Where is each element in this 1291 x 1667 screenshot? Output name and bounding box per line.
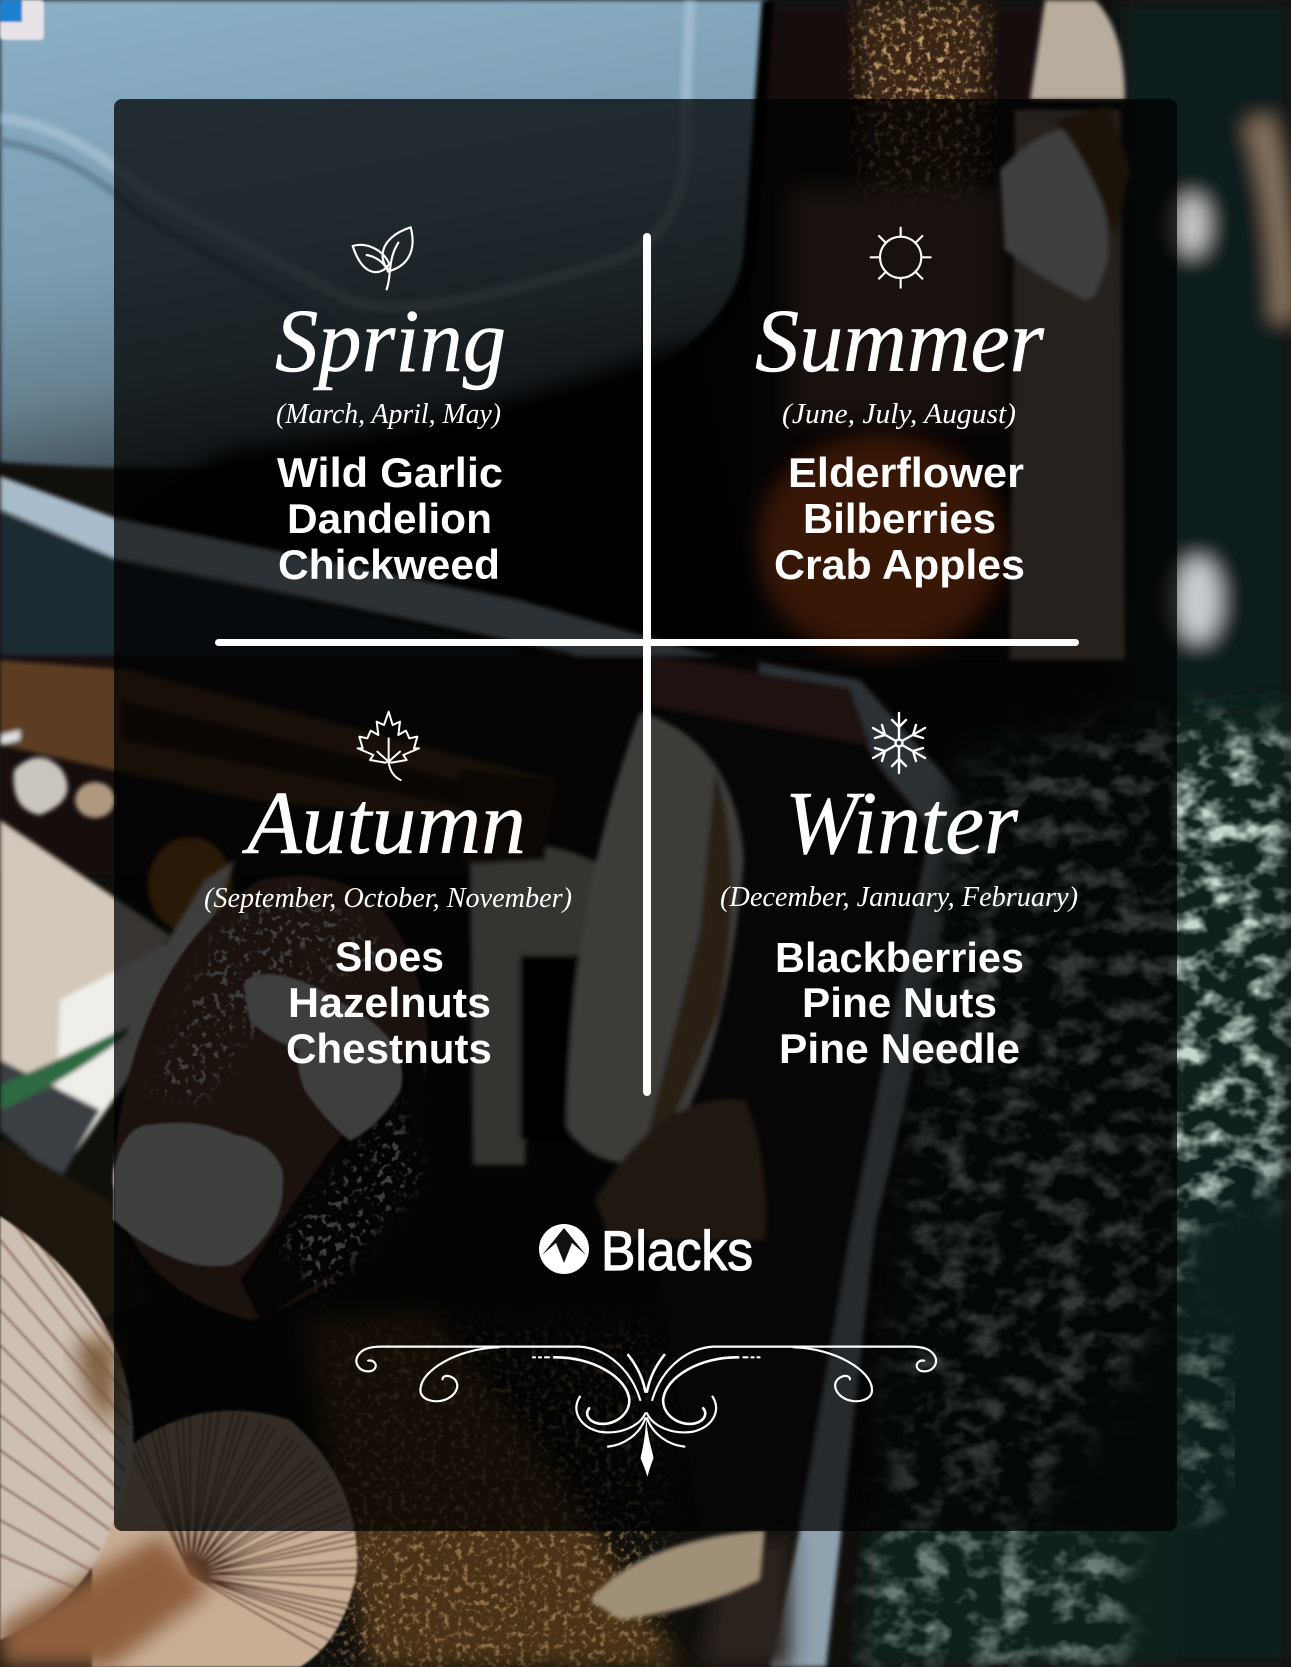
log at bottom [300, 1310, 790, 1667]
badge at top left corner [0, 0, 44, 40]
list: winter forage: Pine Nuts [802, 979, 997, 1026]
icon: sun [871, 228, 931, 288]
list: winter forage [775, 934, 1024, 1072]
gilled mushrooms [0, 1216, 360, 1667]
list: summer forage: Bilberries [803, 495, 996, 542]
left white mushroom [0, 820, 235, 1320]
list: winter forage: Pine Needle [779, 1025, 1020, 1072]
panel: winter [720, 713, 1078, 1072]
vertical divider [643, 233, 651, 1096]
months: autumn: (September, October, November) [204, 882, 572, 914]
logo: Blacks: Blacks [601, 1219, 753, 1282]
icon: snowflake [873, 713, 925, 773]
panel: autumn [204, 712, 572, 1072]
list: summer forage [774, 449, 1025, 588]
list: spring forage: Wild Garlic [277, 449, 503, 496]
list: summer forage: Elderflower [788, 449, 1024, 496]
list: spring forage [277, 449, 503, 588]
panel: summer [755, 228, 1045, 588]
icon: maple leaf [358, 712, 419, 780]
list: autumn forage: Chestnuts [286, 1025, 492, 1072]
list: autumn forage: Hazelnuts [288, 979, 491, 1026]
tray bottom shadow [130, 340, 760, 650]
list: summer forage: Crab Apples [774, 541, 1025, 588]
horizontal divider [215, 639, 1079, 646]
months: winter: (December, January, February) [720, 881, 1078, 913]
upper right [750, 0, 1291, 740]
lid band and dark lower area [0, 476, 975, 1667]
brown scaly mushroom [112, 876, 428, 1320]
list: autumn forage: Sloes [335, 933, 444, 980]
ornament: flourish [356, 1347, 936, 1477]
months: spring: (March, April, May) [276, 398, 501, 430]
heading: Autumn: Autumn [242, 774, 526, 873]
list: spring forage: Dandelion [287, 495, 492, 542]
heading: Summer: Summer [755, 292, 1045, 391]
months: summer: (June, July, August) [782, 398, 1016, 430]
bark branch and debris [0, 660, 555, 933]
list: autumn forage [286, 933, 492, 1072]
logo: Blacks [539, 1219, 753, 1282]
icon: leaves [353, 227, 413, 289]
moss [860, 700, 1291, 1667]
panel: spring [275, 227, 506, 588]
list: winter forage: Blackberries [775, 934, 1024, 981]
cream mushrooms [460, 712, 766, 1240]
heading: Winter: Winter [785, 774, 1019, 873]
heading: Spring: Spring [275, 292, 506, 391]
dark translucent panel [114, 99, 1177, 1531]
list: spring forage: Chickweed [278, 541, 500, 588]
tray [0, 0, 768, 468]
